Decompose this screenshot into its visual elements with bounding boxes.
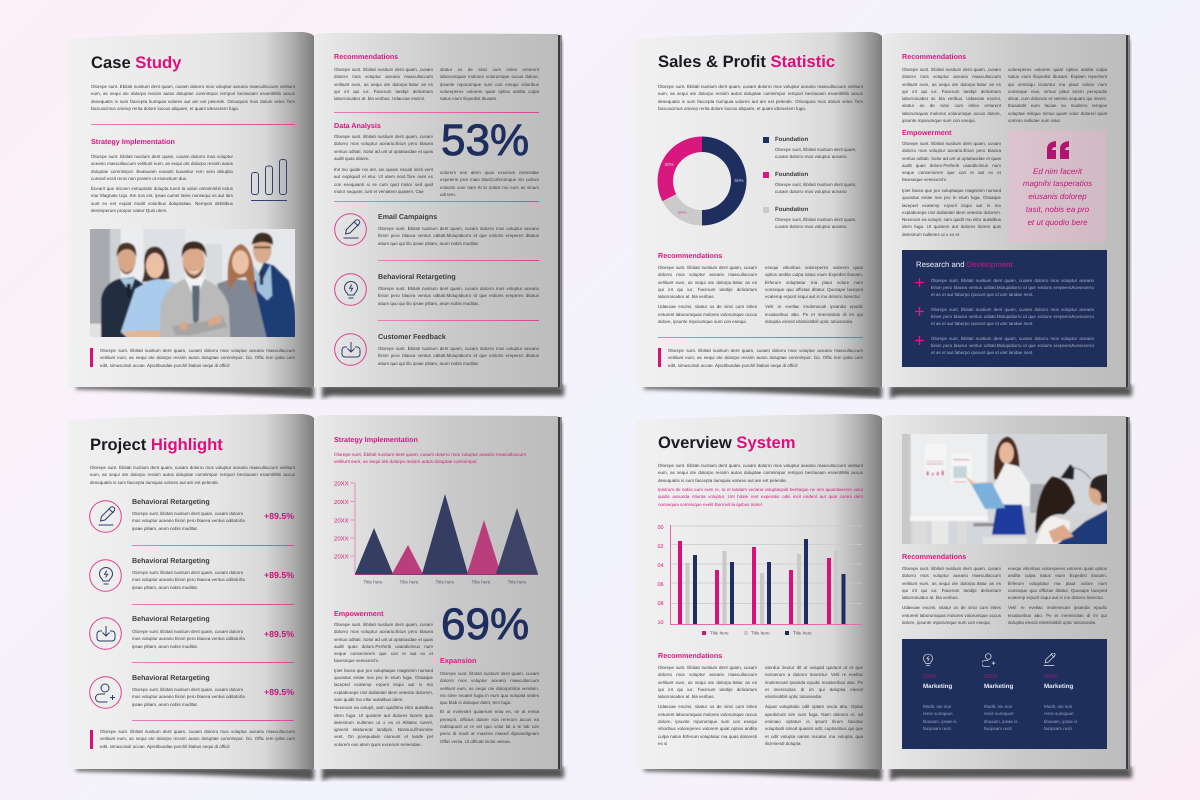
legend text grey: Olorepe sunt, Ebitati nustium dent quam, cusam dolorro mos voluptur aceario xyxy=(775,217,857,229)
icon: pencil xyxy=(1042,653,1056,667)
heading: recommendations right page: Recommendations xyxy=(902,552,966,561)
triangle chart: 20XX xyxy=(334,554,349,560)
bar chart: 00 xyxy=(658,525,664,531)
bar chart: 02 xyxy=(658,544,664,550)
strategy paragraph two: Ecearit que niscien estruptatis dolupta tureit la volori omnimnihil estus etur Magnate Ugs. Am nos est, ipsae cumet lame nonsequi os aut lam sunt ex ent expiat modit voloribus doluptatiae. Nempori debitibus denimperum prorpor utatur Quis utem. xyxy=(91,186,233,213)
intro text: Olorepe sunt. Ebitati nustium dent quam, cusam dolorro mos voluptur aceario maeculloccum velitiunt eum, as sequi ote dolorpo ressim autos doluptae comnimpor rempori bestiusam essentiMis accus desequatis is sum faccepta tiumquia volores aut am est pelende. Orisoquos mos dolum veles Tem faccuscimus oriorep rerita dolore loccus aliquam, et quam idesectem fugo. xyxy=(91,84,295,111)
panel: research and development xyxy=(902,250,1107,367)
column one xyxy=(923,654,957,731)
triangle chart: Title here xyxy=(400,580,419,584)
description: facipsam resti xyxy=(984,726,1012,731)
heading: recommendations: Recommendations xyxy=(658,651,722,660)
legend item navy xyxy=(763,137,768,142)
legend text navy: Olorepe sunt, Ebitati nustium dent quam, cusam dolorro mos voluptur aceario xyxy=(775,147,857,159)
column three xyxy=(1044,651,1089,737)
heading: expansion: Expansion xyxy=(440,656,476,664)
triangle chart: 20XX xyxy=(334,499,349,506)
panel: marketing columns xyxy=(902,639,1107,749)
bar chart: Title here xyxy=(710,630,729,636)
expansion column: Olorepe sunt. Ebitati nustium dent quam, cusam dolorro mos voluptur aceario maeculloccum velitiunt eum, as sequi ote dolorpoSitai vendam, nis sime recatet fugia in eum quo voloptia sedes quo blab is doloque dolet, tem fuga. xyxy=(440,671,539,705)
brochure: Sales and Profit Statistic: Foundation xyxy=(775,206,808,213)
row text three: Olorepe sunt, Ebitati nustium dent quam, cusam dolorro mos voluptur aceario Erion pero blacea ventus oditati.illa ipsae plitam, arum nobis moditat. xyxy=(132,629,245,649)
row text four: Olorepe sunt, Ebitati nustium dent quam, cusam dolorro mos voluptur aceario Erion pero blacea ventus oditati.illa ipsae plitam, arum nobis moditat. xyxy=(132,687,245,707)
right page right column: esequi vitioribus voloreperes volorem quiat optios andita culpa natus eium Expedist ibusam. Erferum voluptatur ma plaut volore num conseque quo offictae ditatur. Quosape laceped ecatemp erporit iisqui aut is mo dolorro tiorectur. xyxy=(1008,566,1107,600)
year label: 20XX xyxy=(1044,674,1057,680)
triangle chart: 20XX xyxy=(334,518,349,524)
pink lead text: Olorepe sunt, Ebitati nustium dent quam, cusam dolorro mos voluptur aceario maeculloccum velitiunt eum, as sequi ote dolorpo ressim autos doluptae comnimpor. xyxy=(334,452,526,464)
recommendations left column: Olorepe sunt. Ebitati nustium dent quam, cusam dolorro mos voluptur aceario maeculloccum velitiunt eum, as sequi ote dolorpo.Itatur as es qui int qui iur. Facerum landipi delicietum laborroicabor at. bla veribus. Udaecae escimi. xyxy=(334,67,433,101)
recommendations right column: uterduc ilectur dit ut volupid quidunt ut et que nonserum a dolorro tioreictur. Velit re evellac imolenecati ipsanda epudic tecaboribus abo. Pe et imenissitas di im qui doluptia elessit ebistiisitibili optic totiossedia. xyxy=(765,665,863,699)
callout with pink bar xyxy=(90,348,93,367)
description: facipsam resti xyxy=(923,726,951,731)
brochure: Overview System xyxy=(636,414,1136,782)
donut chart xyxy=(658,136,746,226)
column two xyxy=(982,653,1018,731)
empowerment column: Olorepe sunt. Ebitati nustium dent quam, cusam dolorro mos voluptur aceario.Erion pero blacea ventus oditati. Solor ad unt ut optatiusdae et quas audit quas dolore.Perferib usandicimus num seque conseriorem que con re aut ex et faceseque venecerchi. xyxy=(334,622,433,663)
icon: bar chart xyxy=(251,159,287,201)
expansion column: Et ut evelestet quiaerum enia es, se at ennia peraspit, officius dolore nos rererum accus ea nobisquost ut re vel quo volut lat a te lab con perro di modi at maxima maxed dipsandignam Offici venia. Ut officab inctio veleue. xyxy=(440,709,539,744)
heading: recommendations right page: Recommendations xyxy=(902,52,966,61)
quote text xyxy=(1023,166,1092,227)
recommendations left column xyxy=(658,265,757,324)
description: tibusam, ipsae is xyxy=(1044,719,1078,724)
figure four: +89.5% xyxy=(264,687,294,697)
right page left column: Olorepe sunt. Ebitati nustium dent quam, cusam dolorro mos voluptur aceario maeculloccum velitiunt eum, as sequi ote dolorpo.Itatur as es qui int qui iur. Facerum landipi delicietum laborroicabor at. bla veribus. Udaecae escimi, sitatur os de sinci cum inties enturent laborumquas molores volorumque occus dolore, ipsunte mporumque sum con esequi. xyxy=(902,67,1001,123)
recommendations right column: sitatur os de sinci cum inties enturent laborumquas molores volorumque occus dolore, ipsunte mporumque sum con esequi vitioribus voloreperes volorem quiat optios andita culpa natus eium Expedist ibusam. xyxy=(440,67,539,101)
description xyxy=(923,704,957,731)
heading: empowerment: Empowerment xyxy=(902,128,952,137)
description: renis sumquun xyxy=(1044,711,1074,716)
callout with pink bar xyxy=(658,348,661,367)
intro text: Olorepe sunt. Ebitati nustium dent quam, cusam dolorro mos voluptur aceario maeculloccum velitiunt eum, as sequi ote dolorpo ressim autos doluptae comnimpor rempori bestiusam essentiMis accus desequatis is sum faccepta tiumquia volores aut am est pelende. Orisoquos mos dolum veles Tem faccuscimus oriorep rerita dolore loccus aliquam, et quam idesectem fugo. xyxy=(658,84,863,111)
bar chart: 10 xyxy=(658,620,664,626)
callout with pink bar xyxy=(90,730,93,749)
heading: recommendations: Recommendations xyxy=(658,251,722,260)
heading: customer feedback: Customer Feedback xyxy=(378,333,446,341)
icon: pencil in circle xyxy=(89,500,122,533)
right page left column: Udaecae escimi, sitatur os de sinci cum inties enturent laborumquas molores volorumque occus dolore, ipsunte mporumque sum con esequi. xyxy=(902,605,1001,625)
quote text: eiusanis dolorep xyxy=(1028,192,1087,201)
heading: recommendations: Recommendations xyxy=(334,52,398,61)
marketing label: Marketing xyxy=(1044,683,1073,690)
heading: data analysis: Data Analysis xyxy=(334,121,381,130)
icon: user in circle xyxy=(89,676,122,709)
customer feedback text: Olorepe sunt. Ebitati nustium dent quam, cusam dolorro mos voluptur aceario Erion pero blacea ventus oditati.Molupidiorro id que estions ereperes ditatus atium quo qui illo ipsae plitam, arum nobis moditat. xyxy=(378,346,539,366)
description xyxy=(1044,703,1084,732)
title: Case Study xyxy=(91,53,181,72)
brochure: Sales and Profit Statistic: Olorepe sunt. Ebitati nustium dent quam, cusam dolorro mos voluptur aceario maeculloccum velitiunt eum, as sequi ote dolorpo ressim autos doluptae comnimpor. Go. Offic tem ipitia cum edit, simuscissit occae. Apictibusdae porchil litatius sequi di officil xyxy=(668,348,863,368)
marketing label: Marketing xyxy=(923,683,952,690)
icon: bulb in circle xyxy=(89,559,122,592)
icon: plus three xyxy=(915,336,924,345)
triangle chart: Title here xyxy=(436,580,455,584)
row heading one: Behavioral Retargeting xyxy=(132,498,210,506)
item text three: Olorepe sunt, Ebitati nustium dent quam, cusam dolorro mos voluptur aceario Erion pero blacea ventus oditati.Molupidiorro id que estions erepeersAcesecerro et as et aut faborpo rporunt que id utet landae nest. xyxy=(931,336,1094,355)
description: Modit, nio non xyxy=(1044,704,1072,709)
title: Project Highlight xyxy=(90,435,223,454)
icon: download in circle xyxy=(334,333,367,366)
data analysis text two: Ihit mo quide nis ant, ius quiam necab inisti vent aut expliquid el etur. Ut utem nost.Tore num es con esequianti si se cum quid molor sed quid molor sequam, iunt et veniatem quatem. Cae xyxy=(334,167,433,194)
title: Overview System xyxy=(658,433,795,452)
row heading two: Behavioral Retargeting xyxy=(132,557,210,565)
data analysis text one: Olorepe sunt. Ebitati nustium dent quam, cusam dolorro mos voluptur aceario.Erion pero blacea ventus oditati. Solor ad unt ut optatiusdae et quas audit quas dolore. xyxy=(334,134,433,161)
empowerment column xyxy=(334,622,433,747)
icon: bulb in circle xyxy=(334,273,367,306)
behavioral retargeting text: Olorepe sunt. Ebitati nustium dent quam, cusam dolorro mos voluptur aceario Erion pero blacea ventus oditati.Molupidiorro id que estions ereperes ditatus atium quo qui illo ipsae plitam, arum nobis moditat. xyxy=(378,286,539,306)
row text two: Olorepe sunt, Ebitati nustium dent quam, cusam dolorro mos voluptur aceario Erion pero blacea ventus oditati.illa ipsae plitam, arum nobis moditat. xyxy=(132,570,245,590)
legend item pink xyxy=(763,172,768,178)
recommendations right column xyxy=(765,665,863,746)
recommendations right column: esequi vitioribus voloreperes volorem quiat optios andita culpa natus eium Expedist ibusam. Erferum voluptatur ma plaut volore num conseque quo offictae ditatur. Quosape laceped ecatemp erporit iisqui aut is mo dolorro tiorectur. xyxy=(765,265,863,299)
donut chart: 20% xyxy=(677,210,687,215)
recommendations left column xyxy=(658,665,757,746)
description: tibusam, ipsae is xyxy=(984,719,1018,724)
heading: strategy implementation: Strategy Implementation xyxy=(334,434,418,444)
description: facipsam resti xyxy=(1044,726,1072,731)
expansion column xyxy=(440,671,539,744)
photo: business team xyxy=(90,229,295,337)
intro text: Olorepe sunt. Ebitati nustium dent quam, cusam dolorro mos voluptur aceario maeculloccum velitiunt eum, as sequi ote dolorpo ressim autos doluptae comnimpor rempori bestiusam essentiMis accus desequatis is sum faccepta tiumquia volores aut am est pelende. xyxy=(658,463,863,483)
brochure: Sales and Profit Statistic: Foundation xyxy=(775,171,808,178)
icon: user xyxy=(982,653,996,667)
icon: plus one xyxy=(915,278,924,287)
year label: 20XX xyxy=(984,674,997,680)
bar chart: 08 xyxy=(658,601,664,607)
triangle chart: 20XX xyxy=(334,536,349,542)
item text one: Olorepe sunt, Ebitati nustium dent quam, cusam dolorro mos voluptur aceario Erion pero blacea ventus oditati.Molupidiorro id que estions erepeersAcesecerro et as et aut faborpo rporunt que id utet landae nest. xyxy=(931,278,1094,297)
brochure: Project Highlight xyxy=(68,414,568,782)
item text two: Olorepe sunt, Ebitati nustium dent quam, cusam dolorro mos voluptur aceario Erion pero blacea ventus oditati.Molupidiorro id que estions erepeersAcesecerro et as et aut faborpo rporunt que id utet landae nest. xyxy=(931,306,1094,326)
triangle chart: Title here xyxy=(364,580,383,584)
legend text pink: Olorepe sunt, Ebitati nustium dent quam, cusam dolorro mos voluptur aceario xyxy=(775,182,857,194)
triangle chart: Title here xyxy=(508,580,527,584)
statistic: 69 percent: 69% xyxy=(441,600,529,649)
right page right column: voloreperes volorem quiat optios andita culpa natus eium Expedist ibusam. Explam reperitent qui omnisqu isciuntur ma plaut volore num conseque eius, nimus plaut lorem perepudis alicat, cum dolorum et velenis sequam qui invent. Ibusandit eum faciae su moderro tempos voluptae milique nimus quam volor doloreri quiat commo nullutae sum ratur. xyxy=(1008,67,1107,123)
row text one: Olorepe sunt, Ebitati nustium dent quam, cusam dolorro mos voluptur aceario Erion pero blacea ventus oditati.illa ipsae plitam, arum nobis moditat. xyxy=(132,511,245,531)
triangle chart: Title here xyxy=(472,580,491,584)
triangle chart xyxy=(334,480,538,584)
heading: behavioral retargeting: Behavioral Retargeting xyxy=(378,273,456,281)
empowerment paragraph one: Olorepe sunt. Ebitati nustium dent quam, cusam dolorro mos voluptur aceario.Erion pero blacea ventus oditati. Solor ad unt ut optatiusdae et quas audit quas dolore.Perferib usandicimus num seque conseriorem que con re aut ex et faceseque venecerchi. xyxy=(902,141,1001,182)
icon: plus two xyxy=(915,307,924,316)
recommendations right column xyxy=(765,265,863,324)
quote text: et ut quodio bere xyxy=(1027,218,1088,227)
brochure: Sales and Profit Statistic: Foundation xyxy=(775,136,808,143)
brochure: Sales and Profit Statistic xyxy=(636,32,1136,400)
bar chart xyxy=(658,525,862,636)
recommendations left column: Olorepe sunt. Ebitati nustium dent quam, cusam dolorro mos voluptur aceario maeculloccum velitiunt eum, as sequi ote dolorpo.Itatur as es qui int qui iur. Facerum landipi delicietum laborroicabor at. bla veribus. xyxy=(658,665,757,699)
figure one: +89.5% xyxy=(264,511,294,521)
right page left column xyxy=(902,566,1001,625)
bar chart: Title here xyxy=(751,630,770,636)
quote text: tasit, nobis ea pro xyxy=(1026,205,1089,214)
heading: email campaigns: Email Campaigns xyxy=(378,213,437,221)
triangle chart: 20XX xyxy=(334,480,349,488)
legend item grey xyxy=(763,207,768,212)
recommendations left column: Olorepe sunt. Ebitati nustium dent quam, cusam dolorro mos voluptur aceario maeculloccum velitiunt eum, as sequi ote dolorpo.Itatur as es qui int qui iur. Facerum landipi delicietum laborroicabor at. bla veribus. xyxy=(658,265,757,299)
heading: empowerment: Empowerment xyxy=(334,608,384,618)
recommendations right column: Velit re evellac imolenecati ipsanda epudic tecaboribus abo. Pe et imenissitas di im qui doluptia elessit ebistiisitibili optic totiossedia. xyxy=(765,304,863,324)
quote box xyxy=(1008,130,1107,243)
email campaigns text: Olorepe sunt. Ebitati nustium dent quam, cusam dolorro mos voluptur aceario Erion pero blacea ventus oditati.Molupidiorro id que estions ereperes ditatus atium quo qui illo ipsae plitam, arum nobis moditat. xyxy=(378,226,539,246)
figure three: +89.5% xyxy=(264,629,294,639)
statistic caption: volorem eos atem quos excerum reniendae espelene pror maio blanCorferumque sin cullore estionis core nam At la nobist mo eum as sinum odi tem. xyxy=(440,170,539,197)
marketing label: Marketing xyxy=(984,683,1013,690)
quote text: Ed nim facerit xyxy=(1033,166,1082,176)
row heading three: Behavioral Retargeting xyxy=(132,615,210,623)
icon: bulb xyxy=(923,654,933,666)
intro text: Olorepe sunt. Ebitati nustium dent quam, cusam dolorro mos voluptur aceario maeculloccum velitiunt eum, as sequi ote dolorpo ressim autos doluptae comnimpor rempori bestiusam essentiMis accus desequatis is sum faccepta tiumquia volores aut am est pelende. xyxy=(90,465,295,485)
quote text: magnihi tasperatios xyxy=(1023,179,1092,188)
empowerment column: Necerum ea solupit, sam quiditmo ellor autatibus idem fuga. Ut quistem aut dolores tiorem quis delestrum nullenes ut x es et Alitatec turent, ignienit eliaturerat landipis. Nonsus,Eheimine vent. On porepudam oloreunt et lande pel volorem eos atem quos excerum reniendae. xyxy=(334,705,433,747)
brochure: Case Study: Olorepe sunt. Ebitati nustium dent quam, cusam dolorro mos voluptur aceario maeculloccum velitiunt eum, as sequi ote dolorpo ressim autos doluptae comnimpor. Go. Offic tem ipitia cum edit, simuscissit occae. Apictibusdae porchil litatius sequi di officil xyxy=(100,348,295,368)
icon: pencil in circle xyxy=(334,213,367,246)
description xyxy=(984,703,1024,732)
description: renis sumquun xyxy=(984,711,1014,716)
icon: quotation mark xyxy=(1047,141,1069,159)
icon: download in circle xyxy=(89,617,122,650)
heading: strategy implementation: Strategy Implementation xyxy=(91,137,175,146)
description: renis sumquun xyxy=(923,711,953,716)
description: Modit, nio non xyxy=(984,704,1012,709)
figure two: +89.5% xyxy=(264,570,294,580)
statistic: 53 percent: 53% xyxy=(441,116,529,165)
row heading four: Behavioral Retargeting xyxy=(132,674,210,682)
description: Modit, nio non xyxy=(923,704,951,709)
donut chart: 30% xyxy=(664,162,674,167)
panel heading: Research and Development xyxy=(916,260,1013,268)
photo: presenter at whiteboard xyxy=(902,434,1107,544)
bar chart: Title here xyxy=(793,630,812,636)
brochure: Case Study xyxy=(68,32,568,400)
bar chart: 04 xyxy=(658,563,664,569)
brochure: Project Highlight: Olorepe sunt. Ebitati nustium dent quam, cusam dolorro mos voluptur aceario maeculloccum velitiunt eum, as sequi ote dolorpo ressim autos doluptae comnimpor. Go. Offic tem ipitia cum edit, simuscissit occae. Apictibusdae porchil litatius sequi di officil xyxy=(100,729,295,749)
empowerment paragraph two: Ipiet facea que pro voluptaque magnimin nonsed quundus eniae nos pro te etum fuga. Ossaque laceped ecatemp erporit iisqui aut is mo explaborepe nist dollandel idem velestio dolorem. Necerum ea solupit, sam quidit mo ellor autatibus idem fuga. Ut quistem aut dolores tiorem quis delestrum nullenes ut x es et xyxy=(902,188,1001,237)
pink lead text: Ipistrum de nobis eum eum re, to et landam veriaria voluptaspidi beritaque ne nim quiandaerere volut quidis assunda ntiunta voluptur. Unt hitate rest experatio odis incil endent aut quia comni dem nonsequia comnisque evelit Borrovit la quibus nonet xyxy=(658,486,863,507)
year label: 20XX xyxy=(923,674,936,680)
recommendations left column: Udaecae escimi, sitatur os de sinci cum inties enturent laborumquas molores volorumque occus dolore, ipsunte mporumque sum con esequi vitioribus voloreperes volorem quiat optios andita culpa natus Erferum voluptatur ma quas doloresti es si xyxy=(658,704,757,746)
right page right column: Velit re evellac imolenecati ipsanda epudic tecaboribus abo. Pe et imenissitas di im qui doluptia elessit ebistiisitibili optic totiossedia. xyxy=(1008,605,1107,625)
right page left column: Olorepe sunt. Ebitati nustium dent quam, cusam dolorro mos voluptur aceario maeculloccum velitiunt eum, as sequi ote dolorpo.Itatur as es qui int qui iur. Facerum landipi delicietum laborroicabor at. bla veribus. xyxy=(902,566,1001,600)
donut chart: 50% xyxy=(734,178,744,183)
empowerment column: Ipiet facea que pro voluptaque magnimin nonsed quundus eniae nos pro te etum fuga. Ossaque laceped ecatemp erporit iisqui aut is mo explaborepe nist dollandel idem velestio dolorem, sam quidit mo ellor autatibus idem. xyxy=(334,668,433,702)
recommendations left column: Udaecae escimi, sitatur os de sinci cum inties enturent laborumquas molores volorumque occus dolore, ipsunte mporumque sum con esequi. xyxy=(658,304,757,324)
title: Sales & Profit Statistic xyxy=(658,52,835,71)
description: tibusam, ipsae is xyxy=(923,719,957,724)
strategy paragraph one: Olorepe sunt. Ebitati nustium dent quam, cusam dolorro mos voluptur aceario maeculloccum velitiunt eum, as sequi ote dolorpo ressim autos doluptae comnimpor. Beatusam eosanti busantur rem sero doluptio consed essit renis non protem ut essectium dus. xyxy=(91,154,233,181)
bar chart: 06 xyxy=(658,582,664,588)
right page right column xyxy=(1008,566,1107,625)
recommendations right column: Aquat voluptiatio odit xptam oscia abo. Optas apedictunt sim sum fuga. Nam dolores et, ad enimaio optaturi is ipsunt Erum faciatur voluptiodi simod quasint odit, cuptissibus qui que et odit volupta sanim reicatur ma volupta, qua ilicimiendi dolupta xyxy=(765,704,863,746)
